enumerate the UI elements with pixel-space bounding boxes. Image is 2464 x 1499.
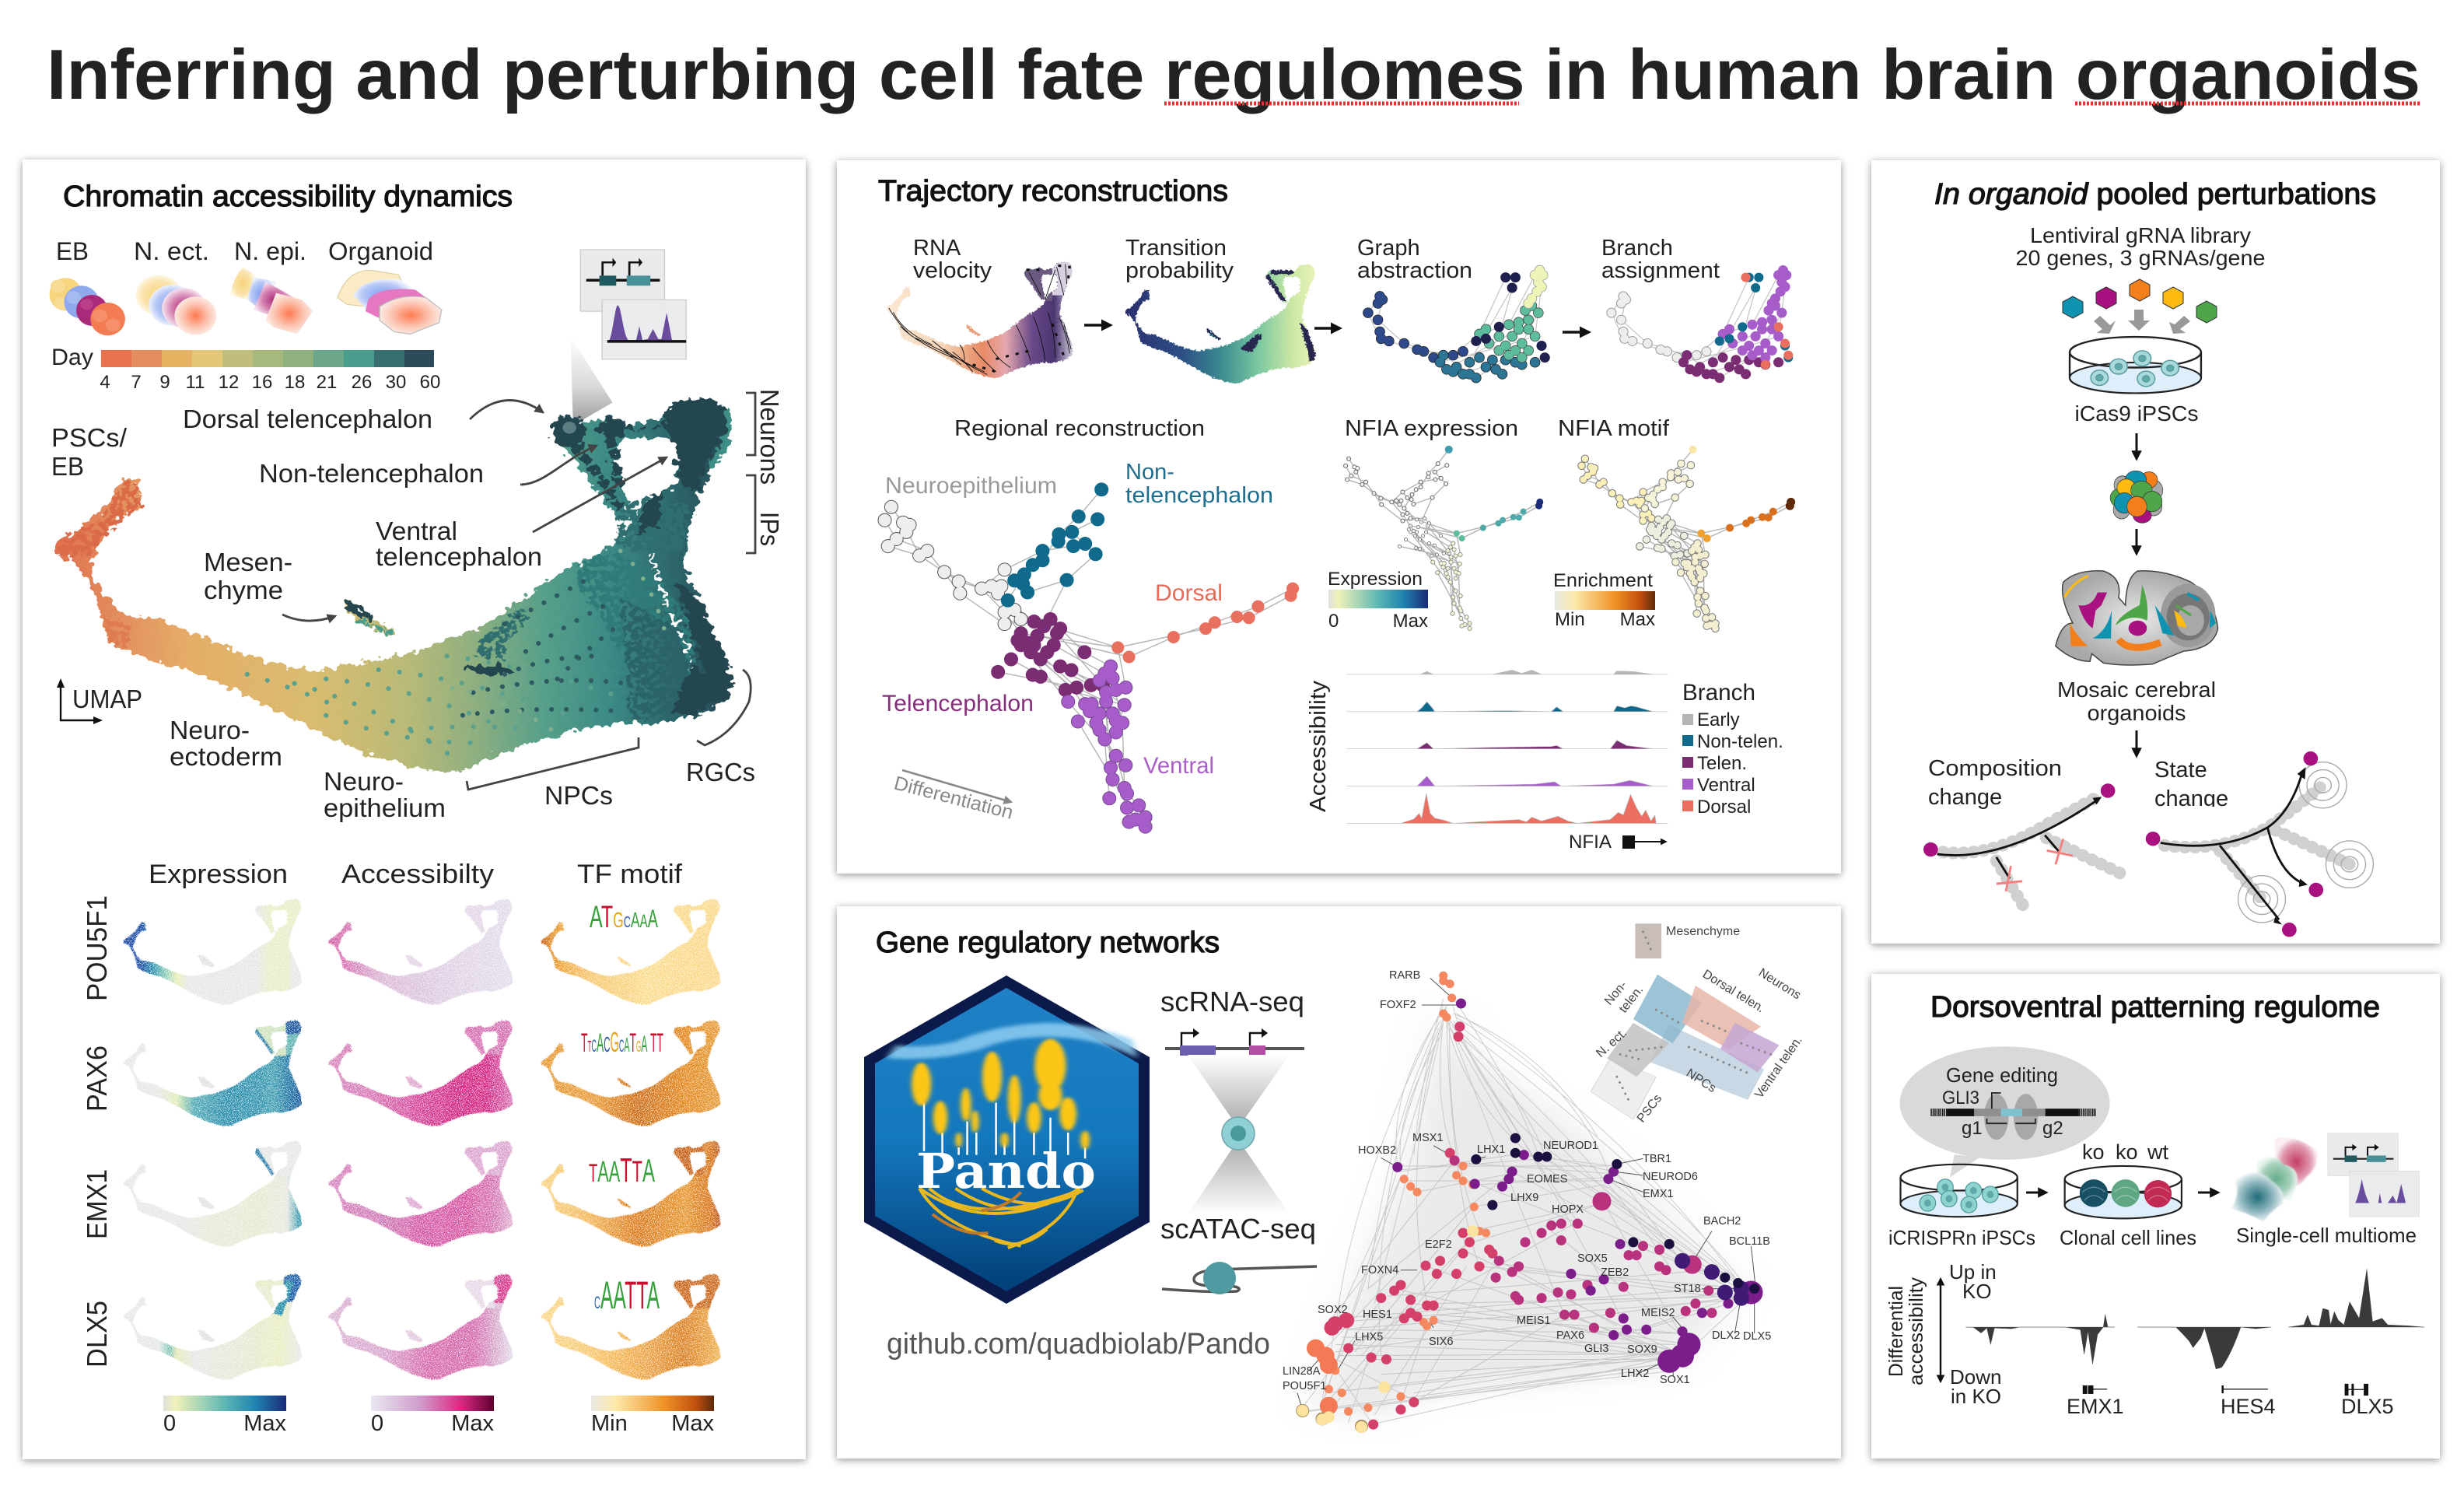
labels: up and down in KO: in KO [1951, 1385, 2001, 1408]
diagram: state change trajectory [2146, 751, 2373, 937]
step labels: Transition [1125, 236, 1227, 261]
labels: cell types on UMAP: Mesen- [204, 548, 292, 576]
row labels: genes: DLX5 [81, 1301, 113, 1368]
step labels: Graph [1357, 236, 1420, 261]
sequence logo: POU5F1 motif: ATGCAAA [590, 900, 658, 934]
arrows and brackets on UMAP [57, 393, 755, 790]
labels: cell types on UMAP: epithelium [324, 793, 446, 822]
legend: NFIA expression: Expression [1328, 569, 1423, 590]
labels: up and down in KO [1949, 1260, 2001, 1408]
gene labels on network: SOX9 [1627, 1343, 1657, 1356]
gene track: NFIA: NFIA [1569, 832, 1612, 853]
gene labels on network: HES1 [1363, 1308, 1392, 1321]
step labels: assignment [1601, 258, 1720, 283]
gene labels on network: PAX6 [1556, 1329, 1584, 1342]
text: library description: Lentiviral gRNA library [2030, 223, 2251, 247]
labels: cell types on UMAP: NPCs [544, 781, 613, 810]
panel: chromatin accessibility dynamics [23, 159, 806, 1459]
stage labels [56, 237, 433, 265]
gene labels on network: LHX1 [1477, 1144, 1505, 1156]
chart: EMX1 accessibility [328, 1138, 516, 1247]
axis label: differential accessibility [1885, 1277, 1927, 1385]
labels: dish and multiome captions: Single-cell multiome [2236, 1224, 2417, 1247]
row labels: genes: PAX6 [81, 1045, 113, 1112]
row labels: genes: EMX1 [81, 1169, 113, 1239]
chart: EMX1 TF motif [541, 1138, 720, 1247]
column headings: expression, accessibility, TF motif: Expression [149, 860, 288, 889]
legend: branch: Non-telen. [1697, 731, 1783, 752]
gene labels on network: TBR1 [1643, 1153, 1671, 1165]
chart: RNA velocity stream [887, 258, 1076, 378]
step labels [913, 236, 1720, 283]
chart: main UMAP of developmental time [55, 398, 732, 772]
label: ko ko wt: wt [2147, 1140, 2168, 1164]
labels: cell types on UMAP: Neurons [755, 389, 784, 485]
diagram: composition change trajectory [1923, 783, 2126, 912]
callout: gene editing bubble: Gene editing [1946, 1063, 2058, 1087]
legend: NFIA enrichment: Max [1620, 609, 1655, 630]
labels: cell types on UMAP: Neuro- [170, 716, 250, 744]
labels: dish and multiome captions: Clonal cell lines [2060, 1226, 2196, 1249]
label: iCas9 iPSCs: iCas9 iPSCs [2075, 401, 2198, 426]
column headings: expression, accessibility, TF motif [149, 860, 683, 889]
subheadings: Regional reconstruction [954, 416, 1205, 441]
chart: PAX6 accessibility [328, 1017, 516, 1126]
callout: gene editing bubble [1900, 1046, 2110, 1178]
legend: branch: Branch [1682, 680, 1755, 706]
legend: day colour bar: 21 [317, 372, 337, 393]
legend: day colour bar: 9 [159, 372, 170, 393]
labels: up and down in KO: Up in [1949, 1260, 1997, 1284]
gene labels on network: HOPX [1552, 1203, 1584, 1216]
chart: regional reconstruction network [884, 489, 1293, 827]
legend: branch: Ventral [1697, 775, 1755, 796]
legend: branch: Dorsal [1697, 797, 1751, 818]
chart: gene regulatory network graph [1297, 975, 1755, 1427]
chart: branch assignment nodes [1612, 271, 1788, 378]
legend: day colour bar: 4 [100, 372, 110, 393]
region labels on network: Neuroepithelium [885, 473, 1057, 499]
label: mosaic cerebral organoids: organoids [2088, 701, 2186, 725]
label: scATAC-seq: scATAC-seq [1160, 1213, 1316, 1245]
chart: DLX5 accessibility [328, 1271, 516, 1380]
labels: track genes [2067, 1395, 2394, 1418]
legend: branch [1682, 680, 1783, 818]
gene labels on network: LIN28A [1283, 1365, 1321, 1378]
labels: cell types on UMAP: telencephalon [376, 542, 542, 571]
legend: day colour bar: 30 [386, 372, 406, 393]
heading: pooled perturbations: In organoid pooled perturbations [1934, 178, 2376, 211]
icon: iCas9 dish [2070, 337, 2201, 393]
legend: day colour bar: 12 [219, 372, 239, 393]
sequence logo: EMX1 motif: TAATTA [589, 1151, 655, 1189]
stage labels: N. epi. [234, 237, 306, 265]
region labels on network [882, 460, 1273, 779]
legend: NFIA enrichment: Min [1555, 609, 1585, 630]
label: composition change: change [1928, 785, 2002, 810]
gene labels on network: ST18 [1674, 1283, 1701, 1295]
title: Inferring and perturbing cell fate regulomes in human brain organoids [47, 36, 2420, 114]
labels: cell types on UMAP: Ventral [376, 517, 457, 545]
gene labels on network: SOX5 [1577, 1252, 1608, 1265]
gene labels on network: DLX5 [1743, 1330, 1771, 1343]
panel: trajectory reconstructions [837, 160, 1841, 874]
column headings: expression, accessibility, TF motif: Accessibilty [341, 860, 494, 889]
text: library description: 20 genes, 3 gRNAs/gene [2016, 246, 2265, 270]
row labels: genes: POU5F1 [81, 895, 113, 1001]
labels: cell types on UMAP: Neuro- [324, 767, 404, 796]
chart: transition probability [1125, 264, 1315, 384]
chart: NFIA motif network [1582, 450, 1791, 629]
label: state change: change [2154, 786, 2228, 811]
arrow: to multiome [2198, 1192, 2218, 1193]
icon: iCRISPRn dish [1901, 1165, 2018, 1217]
link: github: github.com/quadbiolab/Pando [887, 1328, 1270, 1361]
arrow: differentiation: Differentiation [892, 772, 1016, 824]
inset: stacked state planes: NPCs [1684, 1066, 1718, 1095]
gene labels on network: LHX5 [1355, 1331, 1383, 1343]
gene labels on network: LHX9 [1510, 1192, 1538, 1204]
callout: gene and peak insets [570, 250, 686, 426]
text: library description [2016, 223, 2265, 270]
label: composition change [1928, 756, 2062, 810]
step labels: velocity [913, 258, 992, 283]
callout: gene editing bubble: g1 [1962, 1118, 1983, 1139]
icon: organoid stages [50, 267, 442, 335]
step labels: abstraction [1357, 258, 1472, 283]
region labels on network: Telencephalon [882, 691, 1034, 716]
inset: stacked state planes: N. ect. [1594, 1026, 1629, 1060]
label: accessibility axis: Accessibility [1306, 680, 1331, 812]
labels: track genes: HES4 [2221, 1395, 2276, 1418]
subheadings [954, 416, 1670, 441]
chart: graph abstraction nodes [1368, 271, 1545, 378]
callout: gene and peak insets [2328, 1133, 2419, 1217]
gene labels on network: LHX2 [1621, 1368, 1649, 1380]
chart: PAX6 expression [124, 1017, 303, 1126]
legend: motif scale [591, 1396, 714, 1436]
icon: clonal cell lines dish [2065, 1166, 2182, 1218]
arrow: to clones [2026, 1192, 2046, 1193]
legend: NFIA enrichment [1553, 570, 1655, 630]
labels: cell types on UMAP: Dorsal telencephalon [183, 405, 432, 433]
labels: dish and multiome captions: iCRISPRn iPSCs [1888, 1226, 2035, 1249]
labels: cell types on UMAP: RGCs [686, 758, 755, 786]
gene labels on network: NEUROD6 [1643, 1171, 1698, 1183]
legend: expression scale [163, 1396, 286, 1436]
logo: Pando hexagon: Pando [916, 1143, 1096, 1200]
label: scRNA-seq: scRNA-seq [1160, 986, 1304, 1017]
inset: stacked state planes: Ventral telen. [1752, 1034, 1805, 1101]
gene labels on network: MEIS1 [1517, 1315, 1551, 1327]
legend: day colour bar: 11 [186, 372, 205, 393]
chart: POU5F1 TF motif [541, 899, 720, 1005]
gene labels on network: EMX1 [1643, 1188, 1674, 1200]
icon: mosaic cerebral organoid [2056, 571, 2218, 665]
legend: expression scale: 0 [163, 1411, 176, 1436]
icon: single-cell multiome blobs [2231, 1137, 2318, 1221]
panel: gene regulatory networks [837, 906, 1841, 1459]
arrow: up and down axis [1940, 1279, 1941, 1382]
labels: dish and multiome captions [1888, 1224, 2417, 1249]
gene labels on network: BCL11B [1729, 1235, 1770, 1248]
gene labels on network: RARB [1389, 969, 1420, 982]
icon: gRNA hexagons [2063, 279, 2217, 323]
labels: cell types on UMAP [51, 389, 784, 822]
row labels: genes [81, 895, 113, 1368]
legend: branch: Telen. [1697, 753, 1747, 774]
legend: day colour bar: 16 [252, 372, 272, 393]
labels: up and down in KO: KO [1962, 1280, 1992, 1303]
labels: cell types on UMAP: chyme [204, 576, 283, 604]
chart: DLX5 expression [124, 1271, 304, 1380]
heading: trajectory reconstructions: Trajectory reconstructions [878, 175, 1228, 208]
icon: mosaic embryoid [2110, 471, 2163, 523]
chart: PAX6 TF motif [541, 1021, 720, 1126]
legend: motif scale: Min [591, 1411, 628, 1436]
label: state change [2154, 758, 2240, 816]
panel: dorsoventral patterning regulome [1871, 974, 2440, 1459]
sequence logo: PAX6 motif: TTCACGCATGA TT [581, 1026, 663, 1058]
arrow: to embryoid [2136, 433, 2137, 459]
gene track: NFIA [1569, 832, 1666, 853]
arrow: velocity to transition [1084, 324, 1111, 327]
gene labels on network [1283, 969, 1771, 1392]
labels: cell types on UMAP: IPs [755, 512, 784, 546]
labels: track genes: DLX5 [2341, 1395, 2394, 1418]
label: ko ko wt: ko [2116, 1140, 2138, 1164]
legend: accessibility scale [371, 1396, 494, 1436]
legend: expression scale: Max [243, 1411, 286, 1436]
inset: stacked state planes [1591, 923, 1805, 1125]
chart: POU5F1 expression [124, 896, 304, 1005]
gene labels on network: SOX2 [1318, 1304, 1348, 1316]
icon: single cell hourglass [1188, 1055, 1290, 1214]
axis label: differential accessibility: Differential [1885, 1286, 1907, 1377]
label: ko ko wt [2082, 1140, 2168, 1164]
arrow: transition to graph [1314, 327, 1340, 330]
gene models: EMX1, HES4, DLX5 [2083, 1384, 2368, 1396]
labels: cell types on UMAP: UMAP [72, 685, 142, 713]
legend: NFIA expression: 0 [1328, 611, 1339, 632]
gene labels on network: EOMES [1527, 1173, 1567, 1186]
gene labels on network: GLI3 [1584, 1343, 1608, 1355]
chart: differential accessibility tracks [1965, 1270, 2424, 1369]
gene labels on network: DLX2 [1712, 1329, 1740, 1342]
label: composition change: Composition [1928, 756, 2062, 781]
heading: dorsoventral patterning regulome: Dorsoventral patterning regulome [1930, 991, 2380, 1024]
logo: Pando hexagon [864, 975, 1150, 1304]
sequence logo: DLX5 motif: CAATTA [594, 1273, 660, 1317]
labels: cell types on UMAP: ectoderm [170, 742, 282, 771]
label: ko ko wt: ko [2082, 1140, 2105, 1164]
legend: NFIA expression [1328, 569, 1428, 632]
callout: gene editing bubble: GLI3 [1942, 1087, 1979, 1108]
labels: track genes: EMX1 [2067, 1395, 2124, 1418]
label: mosaic cerebral organoids [2057, 678, 2216, 725]
subheadings: NFIA expression [1345, 416, 1518, 441]
labels: cell types on UMAP: EB [51, 452, 84, 481]
stage labels: N. ect. [134, 237, 209, 265]
chart: branch accessibility tracks [1346, 670, 1668, 823]
labels: up and down in KO: Down [1950, 1365, 2001, 1389]
icon: gene model [1165, 1028, 1304, 1056]
chart: NFIA expression network [1346, 450, 1540, 629]
legend: NFIA expression: Max [1393, 611, 1428, 632]
stage labels: Organoid [328, 237, 433, 265]
legend: day colour bar: 60 [420, 372, 440, 393]
gene labels on network: MSX1 [1412, 1132, 1444, 1144]
inset: stacked state planes: Mesenchyme [1666, 925, 1740, 938]
gene labels on network: FOXF2 [1380, 999, 1416, 1011]
axis label: differential accessibility: accessibility [1906, 1277, 1927, 1385]
step labels: Branch [1601, 236, 1673, 261]
legend: accessibility scale: 0 [371, 1411, 383, 1436]
arrow: graph to branch [1563, 331, 1589, 334]
legend: branch: Early [1697, 709, 1740, 730]
chart: EMX1 expression [124, 1138, 306, 1247]
column headings: expression, accessibility, TF motif: TF motif [577, 860, 683, 889]
callout: gene editing bubble: g2 [2042, 1118, 2063, 1139]
legend: motif scale: Max [671, 1411, 714, 1436]
gene labels on network: BACH2 [1703, 1215, 1741, 1228]
inset: stacked state planes: PSCs [1635, 1092, 1664, 1125]
gene labels on network: MEIS2 [1641, 1307, 1675, 1319]
gene labels on network: SOX1 [1660, 1374, 1690, 1386]
gene labels on network: FOXN4 [1361, 1264, 1398, 1277]
label: mosaic cerebral organoids: Mosaic cerebral [2057, 678, 2216, 702]
chart: DLX5 TF motif [541, 1271, 724, 1380]
legend: day colour bar: 26 [352, 372, 372, 393]
gene labels on network: HOXB2 [1358, 1144, 1396, 1157]
step labels: probability [1125, 258, 1234, 283]
region labels on network: Dorsal [1155, 580, 1223, 606]
heading: gene regulatory networks: Gene regulatory networks [876, 926, 1220, 959]
region labels on network: Non- [1125, 460, 1174, 485]
region labels on network: telencephalon [1125, 483, 1273, 508]
inset: stacked state planes: telen. [1617, 983, 1646, 1015]
arrow: to organoids [2136, 529, 2137, 554]
subheadings: NFIA motif [1558, 416, 1670, 441]
gene labels on network: POU5F1 [1283, 1380, 1326, 1392]
legend: day colour bar [100, 350, 440, 393]
heading: chromatin accessibility dynamics: Chromatin accessibility dynamics [63, 180, 513, 213]
panel: in organoid pooled perturbations [1871, 160, 2440, 944]
gene labels on network: SIX6 [1429, 1336, 1453, 1348]
region labels on network: Ventral [1143, 753, 1214, 779]
labels: cell types on UMAP: Non-telencephalon [259, 459, 484, 488]
labels: cell types on UMAP: PSCs/ [51, 423, 128, 452]
inset: stacked state planes: Neurons [1756, 966, 1803, 1002]
stage labels: EB [56, 237, 89, 265]
chart: POU5F1 accessibility [328, 899, 513, 1005]
gene labels on network: E2F2 [1425, 1238, 1452, 1251]
icon: nucleosome [1162, 1262, 1317, 1294]
legend: day colour bar: 7 [131, 372, 142, 393]
label: day scale: Day [51, 345, 93, 370]
legend: NFIA enrichment: Enrichment [1553, 570, 1653, 591]
arrow: to readouts [2136, 730, 2137, 756]
step labels: RNA [913, 236, 961, 261]
legend: day colour bar: 18 [285, 372, 305, 393]
label: state change: State [2154, 758, 2207, 783]
gene labels on network: ZEB2 [1601, 1266, 1629, 1279]
inset: stacked state planes: Dorsal telen. [1700, 968, 1766, 1015]
arrows: grey infection [2094, 310, 2190, 334]
legend: accessibility scale: Max [451, 1411, 494, 1436]
inset: stacked state planes: Non- [1602, 979, 1629, 1008]
gene labels on network: NEUROD1 [1543, 1140, 1598, 1152]
